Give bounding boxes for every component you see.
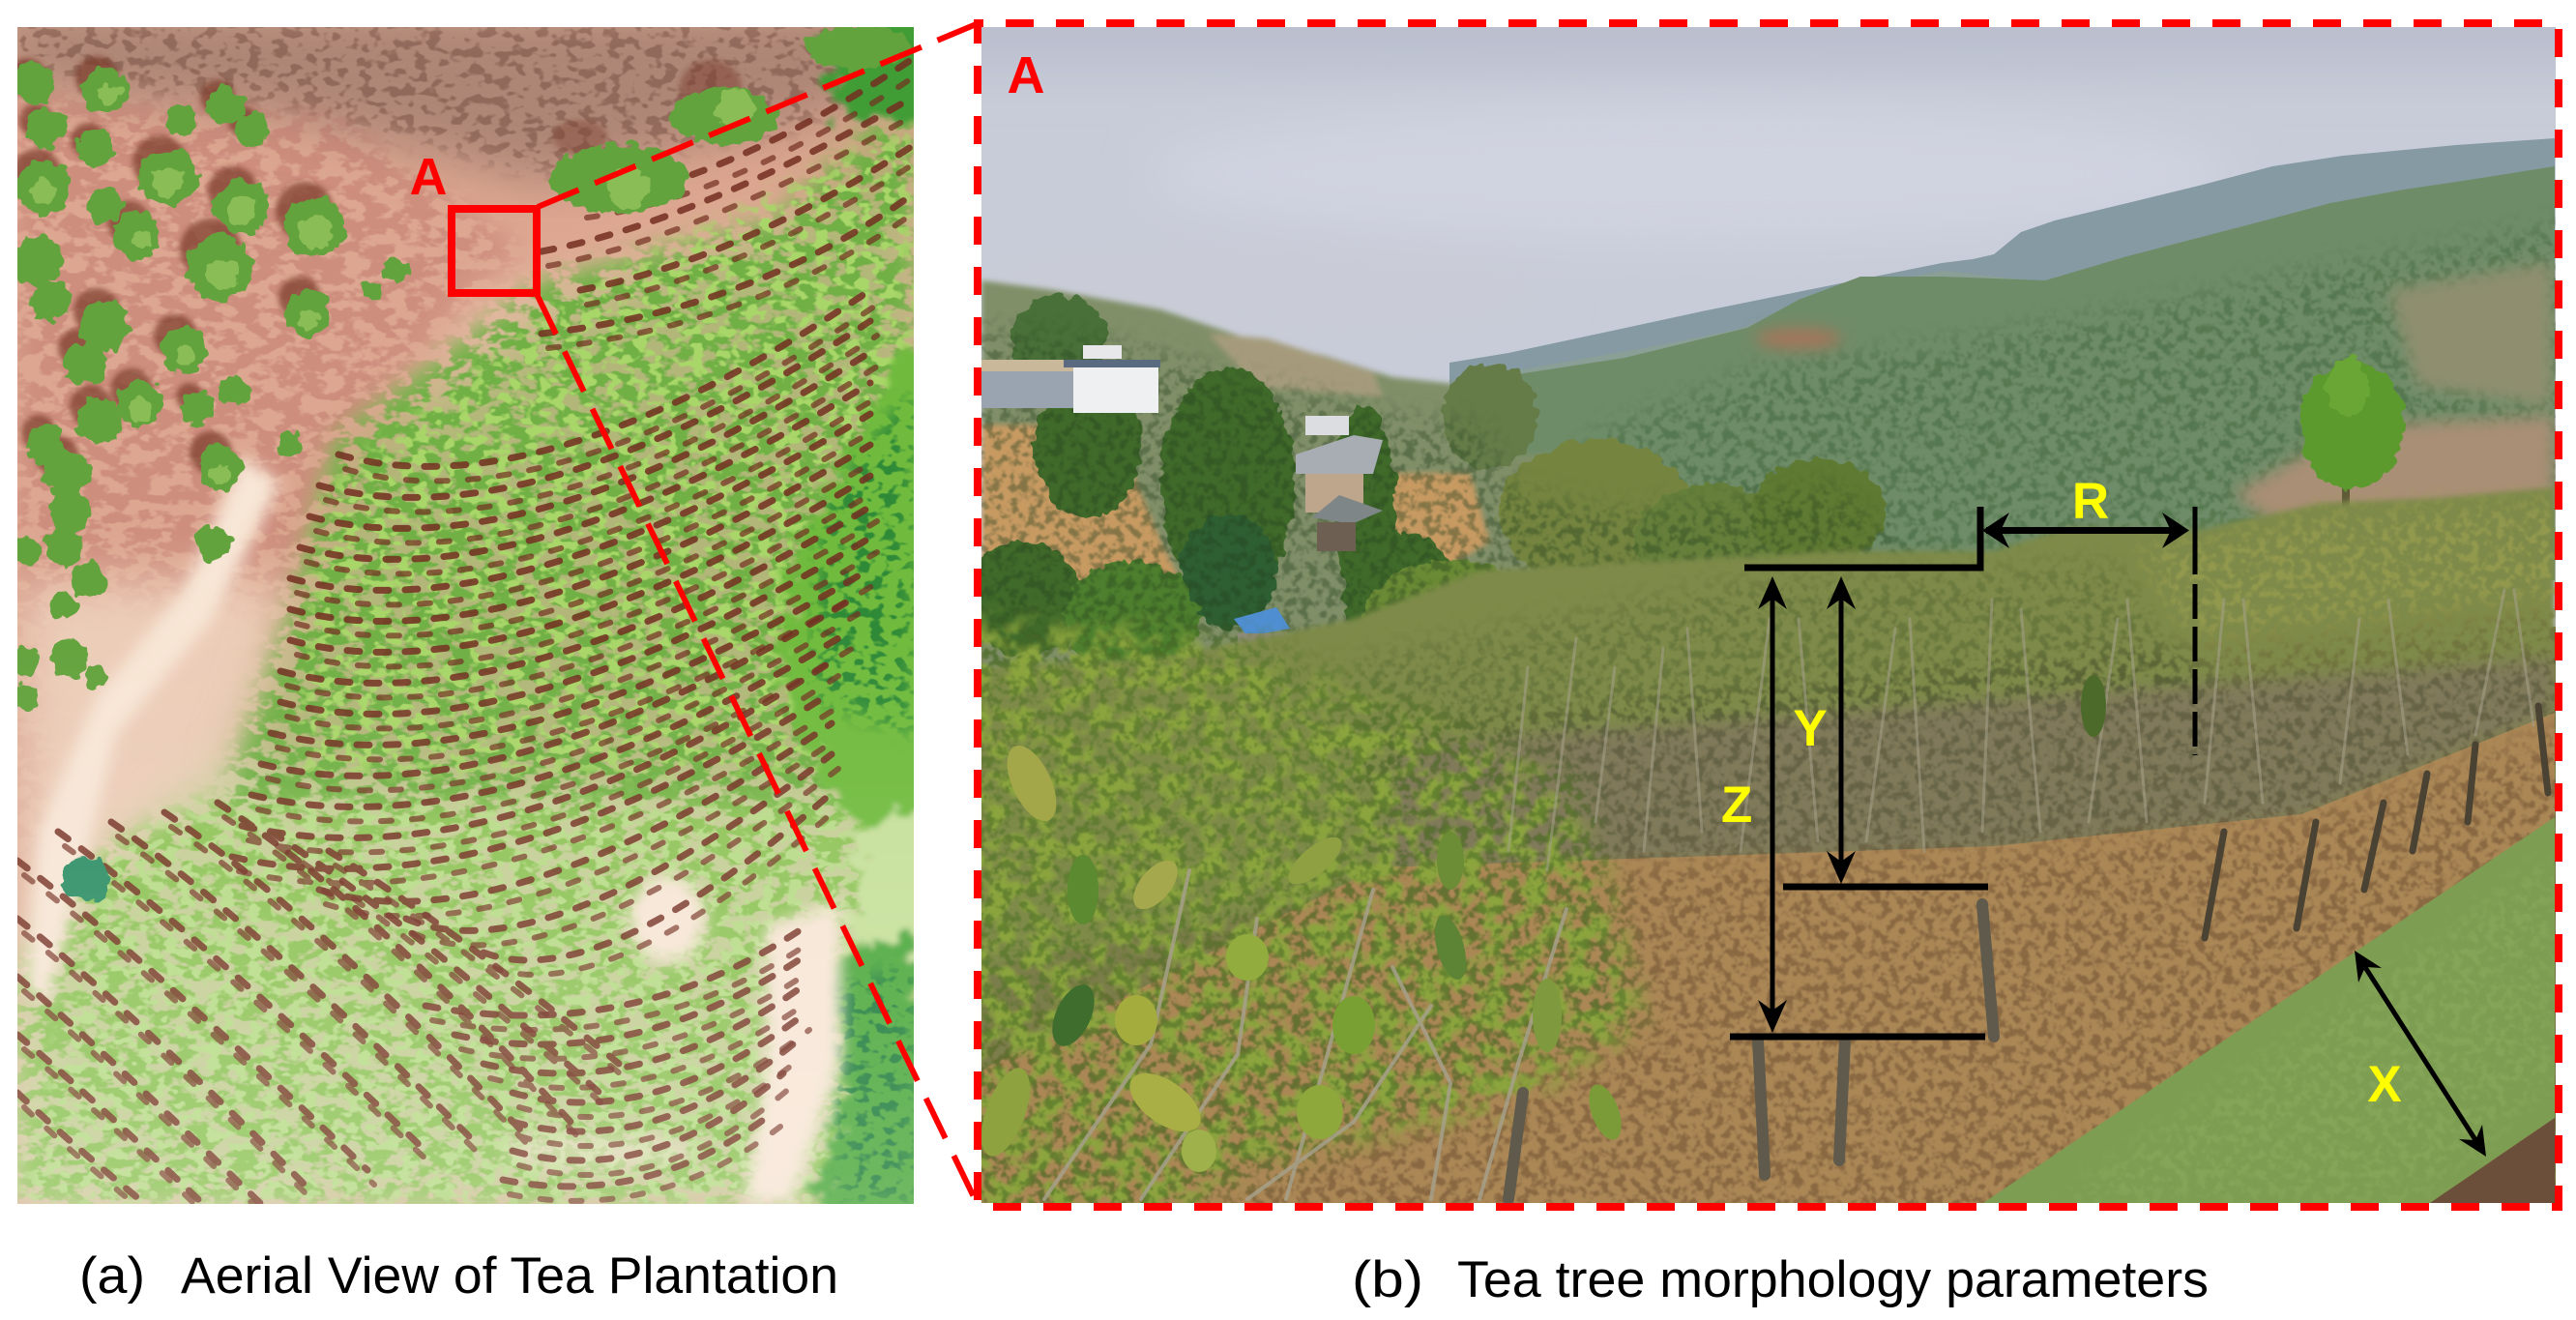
green ground overlay [1983,817,2555,1203]
caption b: (b) [1352,1251,1423,1308]
underlay [981,484,2556,1203]
caption a: Aerial View of Tea Plantation [181,1247,838,1305]
Y arrow [1827,576,1856,884]
upper leader [538,23,979,207]
stems band [1378,658,2555,875]
label Y: Y [1793,700,1828,757]
label A on photo: A [1008,46,1044,104]
hazy valley [1489,271,2031,484]
pale bare paths [25,455,841,1204]
village houses [981,345,1383,708]
stems and trunks [1044,590,2533,1199]
X arrow [2355,951,2486,1157]
canopy clumps [17,87,914,1204]
terraces and bare slopes [1755,261,2555,522]
top horizontal line and R tick [1744,507,1980,568]
R dashed guide [2193,507,2197,755]
isolated trees: shadows [8,56,742,479]
left foliage [919,619,1644,1257]
panel: aerial view of tea plantation [0,10,957,1238]
caption a: (a) [79,1247,145,1305]
dashed frame around photo [978,23,2559,1207]
canopy highlights [17,126,914,1204]
label A on aerial: A [410,148,447,206]
dry brown top band [0,10,928,184]
label R: R [2072,473,2109,530]
canopy base [17,87,914,1204]
panel: tea tree morphology photo [919,0,2576,1257]
poplar tree [2298,358,2405,522]
bright wash [17,619,914,1204]
isolated trees: crowns [11,24,911,903]
parameter labels [1721,473,2402,1113]
soil [981,713,2555,1203]
R arrow [1982,513,2189,548]
dark trees [967,295,1886,677]
label Z: Z [1721,777,1752,834]
Z arrow [1758,576,1787,1033]
soil in field [314,222,913,743]
sky [981,27,2556,627]
right-edge forest [783,10,957,1238]
caption b: Tea tree morphology parameters [1457,1251,2209,1308]
pale lower wash [17,555,293,973]
lower leader [537,294,979,1207]
hillside texture [967,329,1895,696]
tree rows: shadows [17,58,914,1204]
foreground bushes [981,487,2555,967]
dark soil corner [2430,1118,2555,1203]
far bluish ridge [1449,138,2555,580]
near green ridge [1511,166,2555,580]
bottom line [1730,1033,1985,1041]
middle line [1783,884,1988,890]
left hillside and village [981,280,1702,677]
zoom callout: red square and leader lines [452,23,979,1207]
label X: X [2367,1056,2402,1113]
large leaves [972,675,2106,1172]
annotation: height lines and arrows [1730,507,2486,1157]
